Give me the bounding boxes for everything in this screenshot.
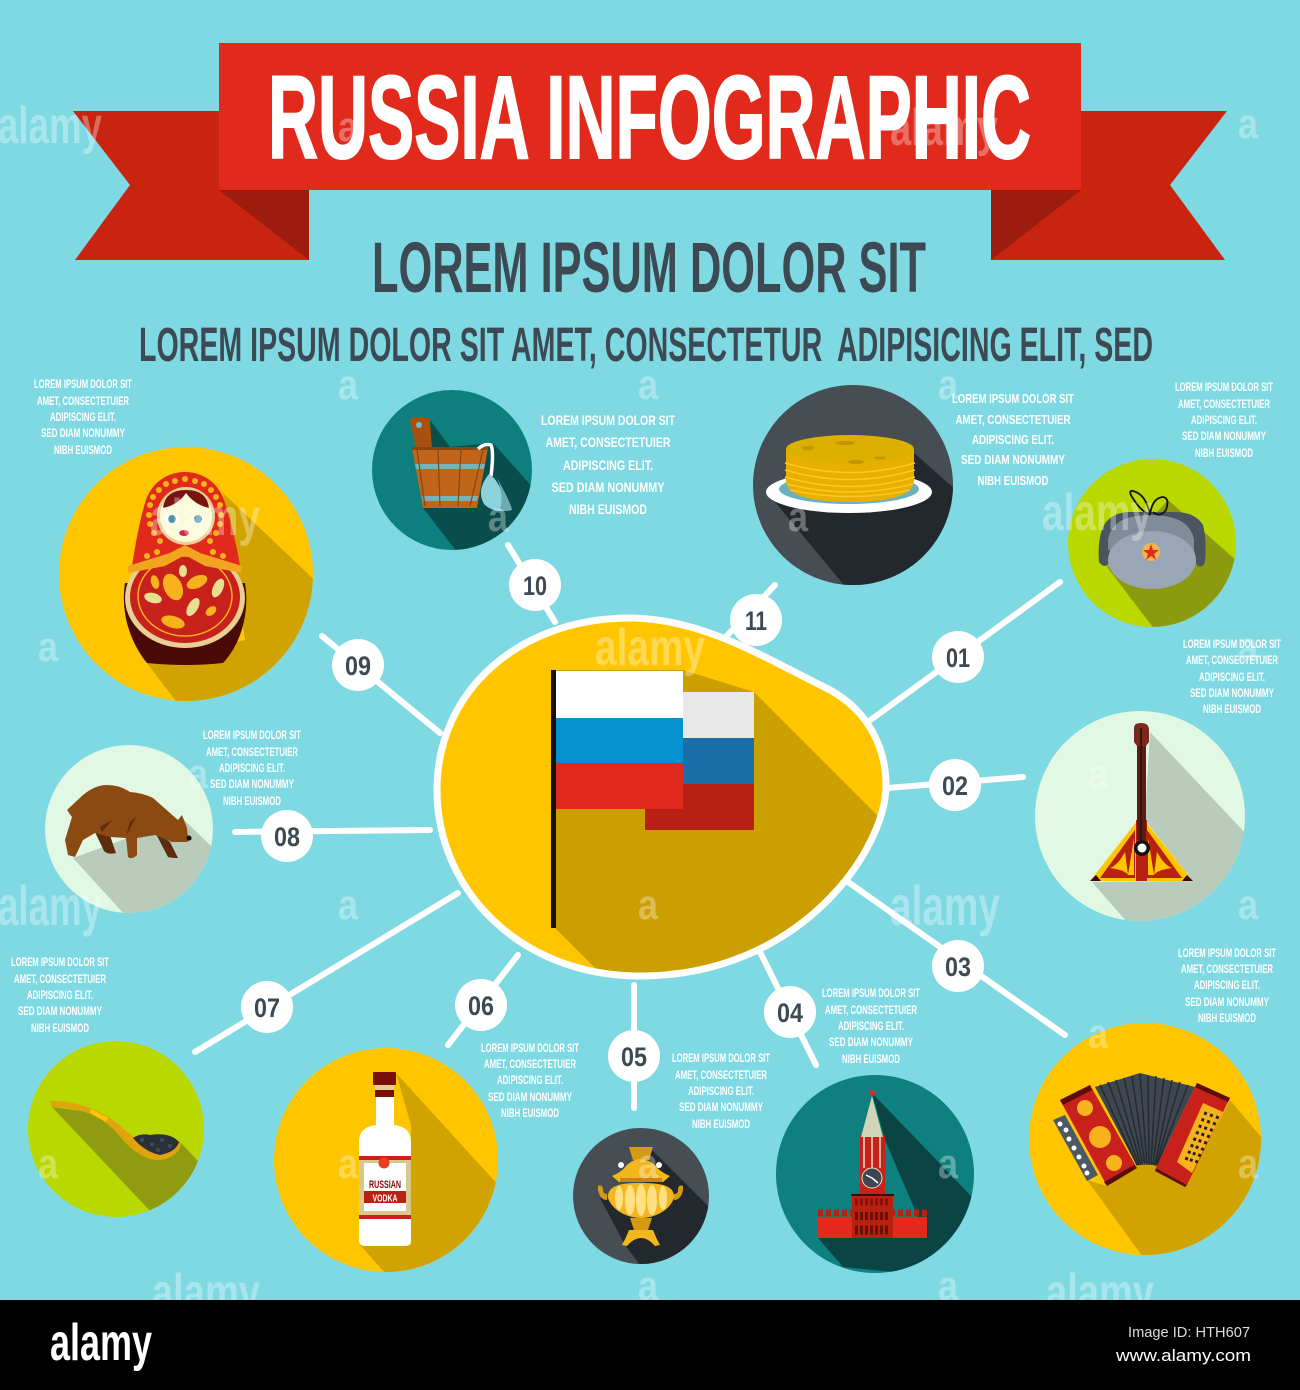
watermarks: a (638, 361, 659, 408)
title banner (73, 43, 1227, 260)
watermarks: a (1238, 1140, 1259, 1187)
watermarks: alamy (890, 874, 1000, 937)
text block: matryoshka: ADIPISCING ELIT. (50, 412, 116, 424)
text block: vodka: NIBH EUISMOD (501, 1108, 559, 1120)
text block: balalaika: NIBH EUISMOD (1203, 704, 1261, 716)
text block: spoon: LOREM IPSUM DOLOR SIT (11, 957, 109, 969)
icon: matryoshka doll (124, 472, 246, 665)
icon: vodka bottle: VODKA (372, 1192, 398, 1204)
text block: vodka: AMET, CONSECTETUIER (484, 1059, 576, 1071)
text block: vodka: SED DIAM NONUMMY (488, 1092, 572, 1104)
text block: bucket: LOREM IPSUM DOLOR SIT (541, 412, 675, 428)
text block: pancakes: AMET, CONSECTETUIER (956, 412, 1071, 427)
watermarks: alamy (0, 874, 102, 937)
icon: samovar (598, 1147, 683, 1246)
text block: matryoshka (34, 379, 132, 457)
icon: spasskaya tower (818, 1090, 927, 1238)
connector lines and number badges: 11 (745, 606, 767, 636)
watermarks: a (38, 623, 59, 670)
watermarks: a (188, 750, 209, 797)
watermarks: a (338, 881, 359, 928)
text block: bear: NIBH EUISMOD (223, 796, 281, 808)
text block: kremlin (822, 988, 920, 1066)
text block: bucket: AMET, CONSECTETUIER (546, 434, 670, 450)
panel 01: ushanka hat (1068, 459, 1238, 640)
watermarks: alamy (595, 619, 705, 677)
connector lines and number badges (195, 545, 1065, 1108)
watermarks: a (638, 881, 659, 928)
watermarks: alamy (0, 97, 102, 155)
text block: pancakes: ADIPISCING ELIT. (972, 432, 1054, 447)
text block: bear: ADIPISCING ELIT. (219, 763, 285, 775)
text block: pancakes: NIBH EUISMOD (978, 473, 1048, 488)
text block: kremlin: ADIPISCING ELIT. (838, 1021, 904, 1033)
icon: ushanka (1099, 491, 1206, 589)
text block: matryoshka: SED DIAM NONUMMY (41, 428, 125, 440)
watermarks: a (1238, 623, 1259, 670)
watermarks: a (788, 493, 809, 540)
text block: samovar: LOREM IPSUM DOLOR SIT (672, 1053, 770, 1065)
watermarks: a (488, 493, 509, 540)
watermarks: a (1238, 881, 1259, 928)
watermarks: a (1238, 100, 1259, 147)
bottle label: RUSSIAN (369, 1179, 401, 1191)
icon: pancake stack on plate (766, 435, 932, 513)
panel 06: vodka (274, 1048, 500, 1280)
watermarks: a (938, 1262, 959, 1309)
watermarks: a (38, 1140, 59, 1187)
text block: spoon: SED DIAM NONUMMY (18, 1006, 102, 1018)
text block: bear (203, 730, 301, 808)
text block: hat: SED DIAM NONUMMY (1182, 431, 1266, 443)
watermarks: a (338, 103, 359, 150)
subtitle: LOREM IPSUM DOLOR SIT (372, 229, 926, 308)
text block: samovar: NIBH EUISMOD (692, 1119, 750, 1131)
central flag blob (437, 618, 900, 993)
text block: hat: NIBH EUISMOD (1195, 448, 1253, 460)
website: www.alamy.com (1115, 1346, 1251, 1365)
footer logo: alamy (50, 1314, 152, 1372)
connector lines and number badges: 03 (945, 952, 971, 982)
connector lines and number badges: 05 (621, 1042, 647, 1072)
footer bar (0, 1300, 1300, 1390)
text block: samovar: SED DIAM NONUMMY (679, 1102, 763, 1114)
icon: bucket and ladle (410, 417, 512, 511)
text block: balalaika: ADIPISCING ELIT. (1199, 672, 1265, 684)
watermarks: alamy (152, 1264, 260, 1322)
text block: bucket: NIBH EUISMOD (569, 501, 647, 517)
text block: bucket (541, 412, 675, 517)
text block: vodka: ADIPISCING ELIT. (497, 1075, 563, 1087)
watermarks: alamy (1042, 484, 1152, 542)
icon: balalaika (1090, 723, 1193, 881)
connector lines and number badges: 09 (345, 651, 371, 681)
panel 10: wooden bucket (372, 390, 535, 555)
text block: pancakes: SED DIAM NONUMMY (961, 452, 1065, 467)
text block: bear: SED DIAM NONUMMY (210, 779, 294, 791)
panel 11: pancakes (753, 385, 953, 585)
icon: accordion (1053, 1073, 1230, 1187)
watermarks: alamy (1046, 1264, 1154, 1322)
icon: spoon with caviar (50, 1101, 181, 1160)
panel 09: matryoshka (59, 447, 313, 701)
watermarks: alamy (890, 99, 998, 157)
text block: pancakes: LOREM IPSUM DOLOR SIT (952, 391, 1074, 406)
watermarks: a (638, 1140, 659, 1187)
text block: accordion: ADIPISCING ELIT. (1194, 980, 1260, 992)
text block: bucket: SED DIAM NONUMMY (552, 479, 665, 495)
connector lines and number badges: 06 (468, 991, 494, 1021)
watermarks: a (1088, 750, 1109, 797)
image id: Image ID: HTH607 (1128, 1324, 1250, 1341)
text block: bear: LOREM IPSUM DOLOR SIT (203, 730, 301, 742)
watermarks: a (338, 1140, 359, 1187)
watermarks: a (638, 1262, 659, 1309)
text block: vodka: LOREM IPSUM DOLOR SIT (481, 1043, 579, 1055)
panel 02: balalaika (1035, 711, 1250, 930)
text block: bear: AMET, CONSECTETUIER (206, 747, 298, 759)
text block: spoon: AMET, CONSECTETUIER (14, 974, 106, 986)
text block: bucket: ADIPISCING ELIT. (563, 457, 653, 473)
connector lines and number badges: 08 (274, 822, 300, 852)
text block: kremlin: LOREM IPSUM DOLOR SIT (822, 988, 920, 1000)
icon: russian flag (551, 670, 754, 928)
watermarks: a (1088, 1010, 1109, 1057)
panel 08: bear (45, 745, 215, 920)
text block: hat (1175, 382, 1273, 460)
watermarks: alamy (150, 489, 260, 547)
watermarks: a (938, 361, 959, 408)
text block: balalaika (1183, 639, 1281, 716)
icon: vodka bottle (359, 1072, 411, 1246)
text block: samovar: AMET, CONSECTETUIER (675, 1070, 767, 1082)
text block: vodka (481, 1043, 579, 1120)
text block: kremlin: AMET, CONSECTETUIER (825, 1005, 917, 1017)
panel 03: accordion (1029, 1023, 1270, 1270)
text block: accordion: NIBH EUISMOD (1198, 1013, 1256, 1025)
text block: pancakes (952, 391, 1074, 488)
connector lines and number badges: 10 (523, 571, 547, 601)
text block: samovar: ADIPISCING ELIT. (688, 1086, 754, 1098)
text block: kremlin: SED DIAM NONUMMY (829, 1037, 913, 1049)
connector lines and number badges: 04 (777, 998, 803, 1028)
text block: samovar (672, 1053, 770, 1131)
text block: kremlin: NIBH EUISMOD (842, 1054, 900, 1066)
text block: accordion (1178, 948, 1276, 1025)
connector lines and number badges: 01 (946, 643, 970, 673)
panel 05: samovar (573, 1128, 712, 1270)
connector lines and number badges: 07 (254, 993, 280, 1023)
text block: spoon: ADIPISCING ELIT. (27, 990, 93, 1002)
watermarks: a (938, 1140, 959, 1187)
panel 04: kremlin tower (776, 1075, 975, 1280)
watermarks: a (338, 361, 359, 408)
text block: matryoshka: AMET, CONSECTETUIER (37, 396, 129, 408)
text block: spoon (11, 957, 109, 1035)
panel 07: caviar spoon (28, 1041, 206, 1217)
text block: hat: ADIPISCING ELIT. (1191, 415, 1257, 427)
text block: matryoshka: NIBH EUISMOD (54, 445, 112, 457)
icon: bear (65, 785, 192, 858)
text block: matryoshka: LOREM IPSUM DOLOR SIT (34, 379, 132, 391)
text block: spoon: NIBH EUISMOD (31, 1023, 89, 1035)
connector lines and number badges: 02 (942, 771, 968, 801)
